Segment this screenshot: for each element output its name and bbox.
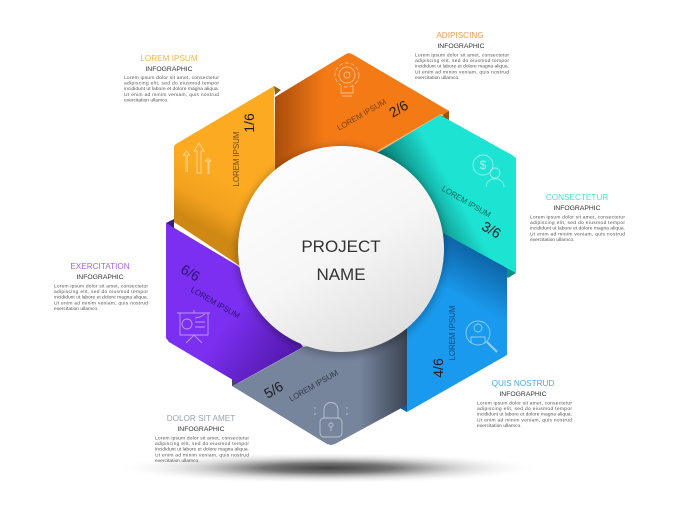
center circle: NAME xyxy=(316,265,366,284)
text block: adipiscing: Lorem ipsum dolor sit amet, consectetur xyxy=(415,52,509,58)
text block: consectetur xyxy=(530,193,625,243)
text block: quis nostrud: adipiscing elit, sed do eiusmod tempor xyxy=(477,406,572,412)
text block: quis nostrud: incididunt ut labore et dolore magna aliqua. xyxy=(477,412,572,418)
heading: lorem ipsum: LOREM IPSUM xyxy=(336,97,388,132)
text block: dolor sit amet: exercitation ullamco. xyxy=(155,458,200,464)
text block: exercitation: Lorem ipsum dolor sit amet, consectetur xyxy=(54,284,148,290)
text block: exercitation: exercitation ullamco. xyxy=(54,306,99,312)
text block: consectetur: incididunt ut labore et dolore magna aliqua. xyxy=(530,226,625,232)
text block: dolor sit amet: INFOGRAPHIC xyxy=(177,426,225,433)
text block: lorem ipsum: Ut enim ad minim veniam, quis nostrud xyxy=(124,92,219,98)
text block: exercitation: Ut enim ad minim veniam, quis nostrud xyxy=(54,300,148,306)
segment 3/6: teal panel xyxy=(377,115,516,278)
text block: lorem ipsum: adipiscing elit, sed do eiusmod tempor xyxy=(124,81,219,87)
text block: quis nostrud: exercitation ullamco. xyxy=(477,423,522,429)
label 1/6: 1/6 xyxy=(241,113,257,133)
heading: lorem ipsum: LOREM IPSUM xyxy=(448,305,457,360)
text block: quis nostrud: INFOGRAPHIC xyxy=(499,391,547,398)
segment 4/6: blue panel xyxy=(400,226,507,412)
center circle xyxy=(236,146,446,356)
title: PROJECT xyxy=(301,237,381,256)
text block: consectetur: adipiscing elit, sed do eiusmod tempor xyxy=(530,220,625,226)
icon: dollar person: $ xyxy=(480,158,487,172)
segment 2/6: orange panel xyxy=(275,53,449,170)
text block: consectetur: INFOGRAPHIC xyxy=(553,205,601,212)
text block: adipiscing: incididunt ut labore et dolore magna aliqua. xyxy=(415,64,509,70)
icon: padlock xyxy=(314,402,348,437)
segment 1/6: amber panel xyxy=(174,86,290,270)
label 3/6: 3/6 xyxy=(479,218,504,242)
text block: dolor sit amet xyxy=(155,414,249,464)
label 5/6: 5/6 xyxy=(261,378,286,401)
heading: lorem ipsum: LOREM IPSUM xyxy=(232,131,241,186)
text block: adipiscing xyxy=(415,31,509,81)
text block: exercitation xyxy=(54,262,148,312)
heading: lorem ipsum: LOREM IPSUM xyxy=(288,368,340,403)
text block: quis nostrud xyxy=(477,379,572,429)
text block: quis nostrud: QUIS NOSTRUD xyxy=(492,379,554,388)
icon: presentation board xyxy=(177,310,210,343)
icon: person search xyxy=(466,321,497,352)
text block: lorem ipsum: Lorem ipsum dolor sit amet, consectetur xyxy=(124,75,219,81)
text block: consectetur: Lorem ipsum dolor sit amet, consectetur xyxy=(530,214,625,220)
text block: dolor sit amet: adipiscing elit, sed do eiusmod tempor xyxy=(155,441,249,447)
segment 6/6: purple panel xyxy=(166,219,303,383)
icon: dollar person xyxy=(473,155,504,187)
text block: lorem ipsum: exercitation ullamco. xyxy=(124,97,169,103)
label 6/6: 6/6 xyxy=(178,261,203,285)
text block: dolor sit amet: DOLOR SIT AMET xyxy=(167,414,235,423)
text block: lorem ipsum xyxy=(124,54,219,103)
text block: quis nostrud: Ut enim ad minim veniam, quis nostrud xyxy=(477,417,572,423)
text block: adipiscing: exercitation ullamco. xyxy=(415,75,460,81)
text block: adipiscing: ADIPISCING xyxy=(436,31,484,40)
text block: adipiscing: INFOGRAPHIC xyxy=(437,43,485,50)
heading: lorem ipsum: LOREM IPSUM xyxy=(440,184,493,220)
text block: lorem ipsum: INFOGRAPHIC xyxy=(145,66,193,73)
label 4/6: 4/6 xyxy=(430,358,446,378)
text block: adipiscing: adipiscing elit, sed do eiusmod tempor xyxy=(415,58,509,64)
text block: consectetur: Ut enim ad minim veniam, quis nostrud xyxy=(530,231,625,237)
segment 5/6: gray panel xyxy=(232,325,407,445)
text block: consectetur: exercitation ullamco. xyxy=(530,237,575,243)
text block: exercitation: INFOGRAPHIC xyxy=(76,274,124,281)
text block: exercitation: incididunt ut labore et dolore magna aliqua. xyxy=(54,295,148,301)
text block: dolor sit amet: incididunt ut labore et dolore magna aliqua. xyxy=(155,447,249,453)
text block: exercitation: adipiscing elit, sed do eiusmod tempor xyxy=(54,289,148,295)
text block: adipiscing: Ut enim ad minim veniam, quis nostrud xyxy=(415,69,509,75)
ground shadow xyxy=(113,452,543,484)
icon: gear bulb xyxy=(335,63,359,96)
heading: lorem ipsum: LOREM IPSUM xyxy=(189,285,242,321)
text block: consectetur: CONSECTETUR xyxy=(546,193,608,202)
text block: dolor sit amet: Lorem ipsum dolor sit amet, consectetur xyxy=(155,436,249,442)
text block: lorem ipsum: LOREM IPSUM xyxy=(140,54,198,63)
text block: lorem ipsum: incididunt ut labore et dolore magna aliqua. xyxy=(124,86,219,92)
text block: dolor sit amet: Ut enim ad minim veniam, quis nostrud xyxy=(155,452,249,458)
icon: growth arrows xyxy=(184,143,211,174)
text block: quis nostrud: Lorem ipsum dolor sit amet, consectetur xyxy=(477,400,572,406)
text block: exercitation: EXERCITATION xyxy=(70,262,130,271)
label 2/6: 2/6 xyxy=(386,97,411,120)
